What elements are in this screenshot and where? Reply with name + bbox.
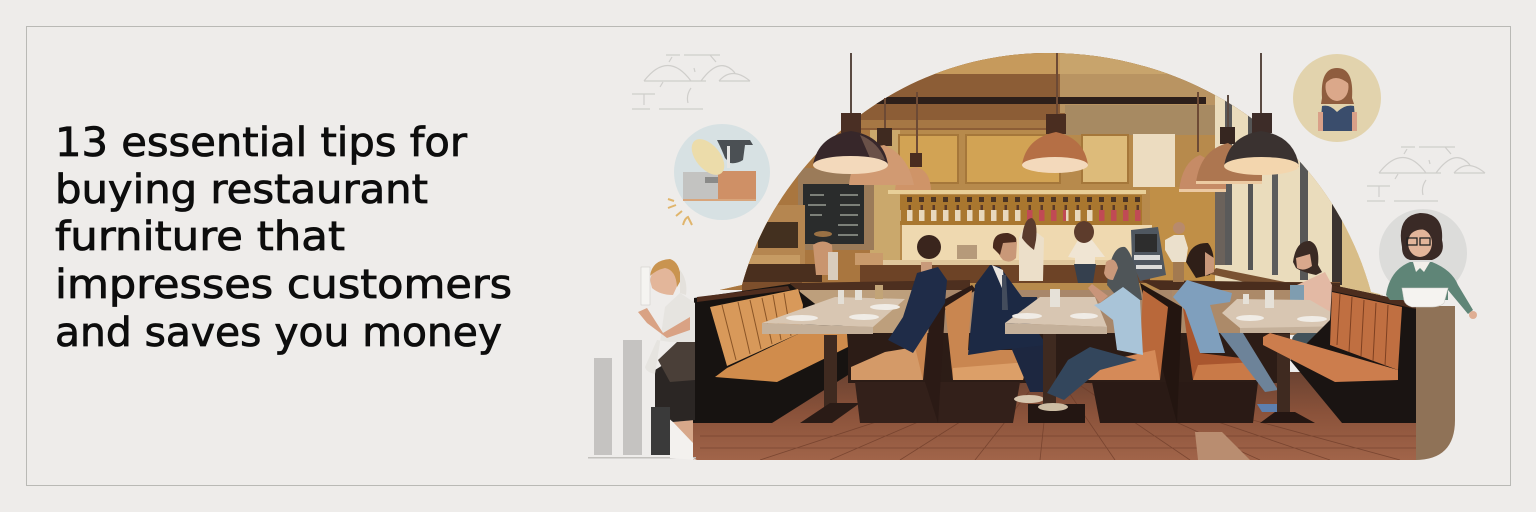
lamp: dark left	[813, 53, 888, 174]
lamp: copper far left	[895, 92, 931, 190]
icon: furniture tools circle	[674, 124, 770, 220]
chalkboard	[798, 168, 874, 250]
table 1	[762, 285, 905, 423]
barista	[1165, 222, 1188, 282]
table 2	[1005, 289, 1107, 423]
coffee machine	[1131, 227, 1166, 281]
booth: left bench	[693, 284, 848, 423]
person: woman in pink top	[1290, 241, 1333, 349]
ceiling	[861, 53, 1252, 130]
windows	[1210, 95, 1383, 296]
wood wall right	[1150, 187, 1220, 282]
lamp: dark right	[1224, 53, 1299, 175]
restaurant scene	[690, 50, 1425, 462]
title: 13 essential tips for	[55, 120, 468, 166]
title: furniture that	[55, 214, 345, 260]
booth: third bench pair	[1088, 283, 1266, 423]
decorative line art: clouds right	[1367, 147, 1485, 201]
floor	[693, 372, 1416, 460]
title: buying restaurant	[55, 167, 428, 213]
person: woman in light blue	[1038, 247, 1143, 411]
wall	[720, 53, 1370, 290]
table 3	[1222, 290, 1353, 423]
backlit counter wall	[902, 225, 1152, 263]
back counter	[855, 245, 1150, 283]
person: woman with bottle at left	[638, 259, 697, 460]
waitress back	[1019, 218, 1044, 281]
booth: right bench	[1263, 285, 1416, 423]
lamp: copper far right	[1179, 92, 1226, 192]
ceiling rail	[870, 97, 1206, 104]
lamp: copper mid left	[849, 98, 914, 185]
back partitions	[790, 280, 1340, 383]
person: man in suit	[968, 233, 1047, 403]
white bowl	[1402, 288, 1448, 307]
booth: second bench pair	[851, 285, 1030, 423]
wall panels	[899, 135, 1128, 183]
tan end panel	[1415, 306, 1455, 460]
avatar: woman in top circle	[1293, 54, 1381, 142]
bar chart	[588, 340, 696, 458]
title	[55, 120, 512, 356]
avatar: woman with glasses	[1379, 209, 1477, 319]
chef at bar	[813, 231, 838, 280]
left wall	[720, 130, 870, 290]
title: impresses customers	[55, 262, 512, 308]
title: and saves you money	[55, 310, 502, 356]
sparkle lines	[668, 199, 692, 225]
lamp: copper near right	[1196, 95, 1262, 184]
person: man in navy seen from behind	[888, 235, 947, 353]
background staff	[813, 218, 1188, 283]
lamp: copper center	[1022, 53, 1088, 173]
waitress right	[1068, 221, 1105, 283]
left bar shelves	[742, 205, 822, 294]
decorative line art: clouds left	[632, 55, 750, 109]
bottle shelf	[888, 190, 1146, 225]
white panel	[1133, 134, 1175, 187]
person: man in blue hoodie	[1173, 243, 1278, 412]
